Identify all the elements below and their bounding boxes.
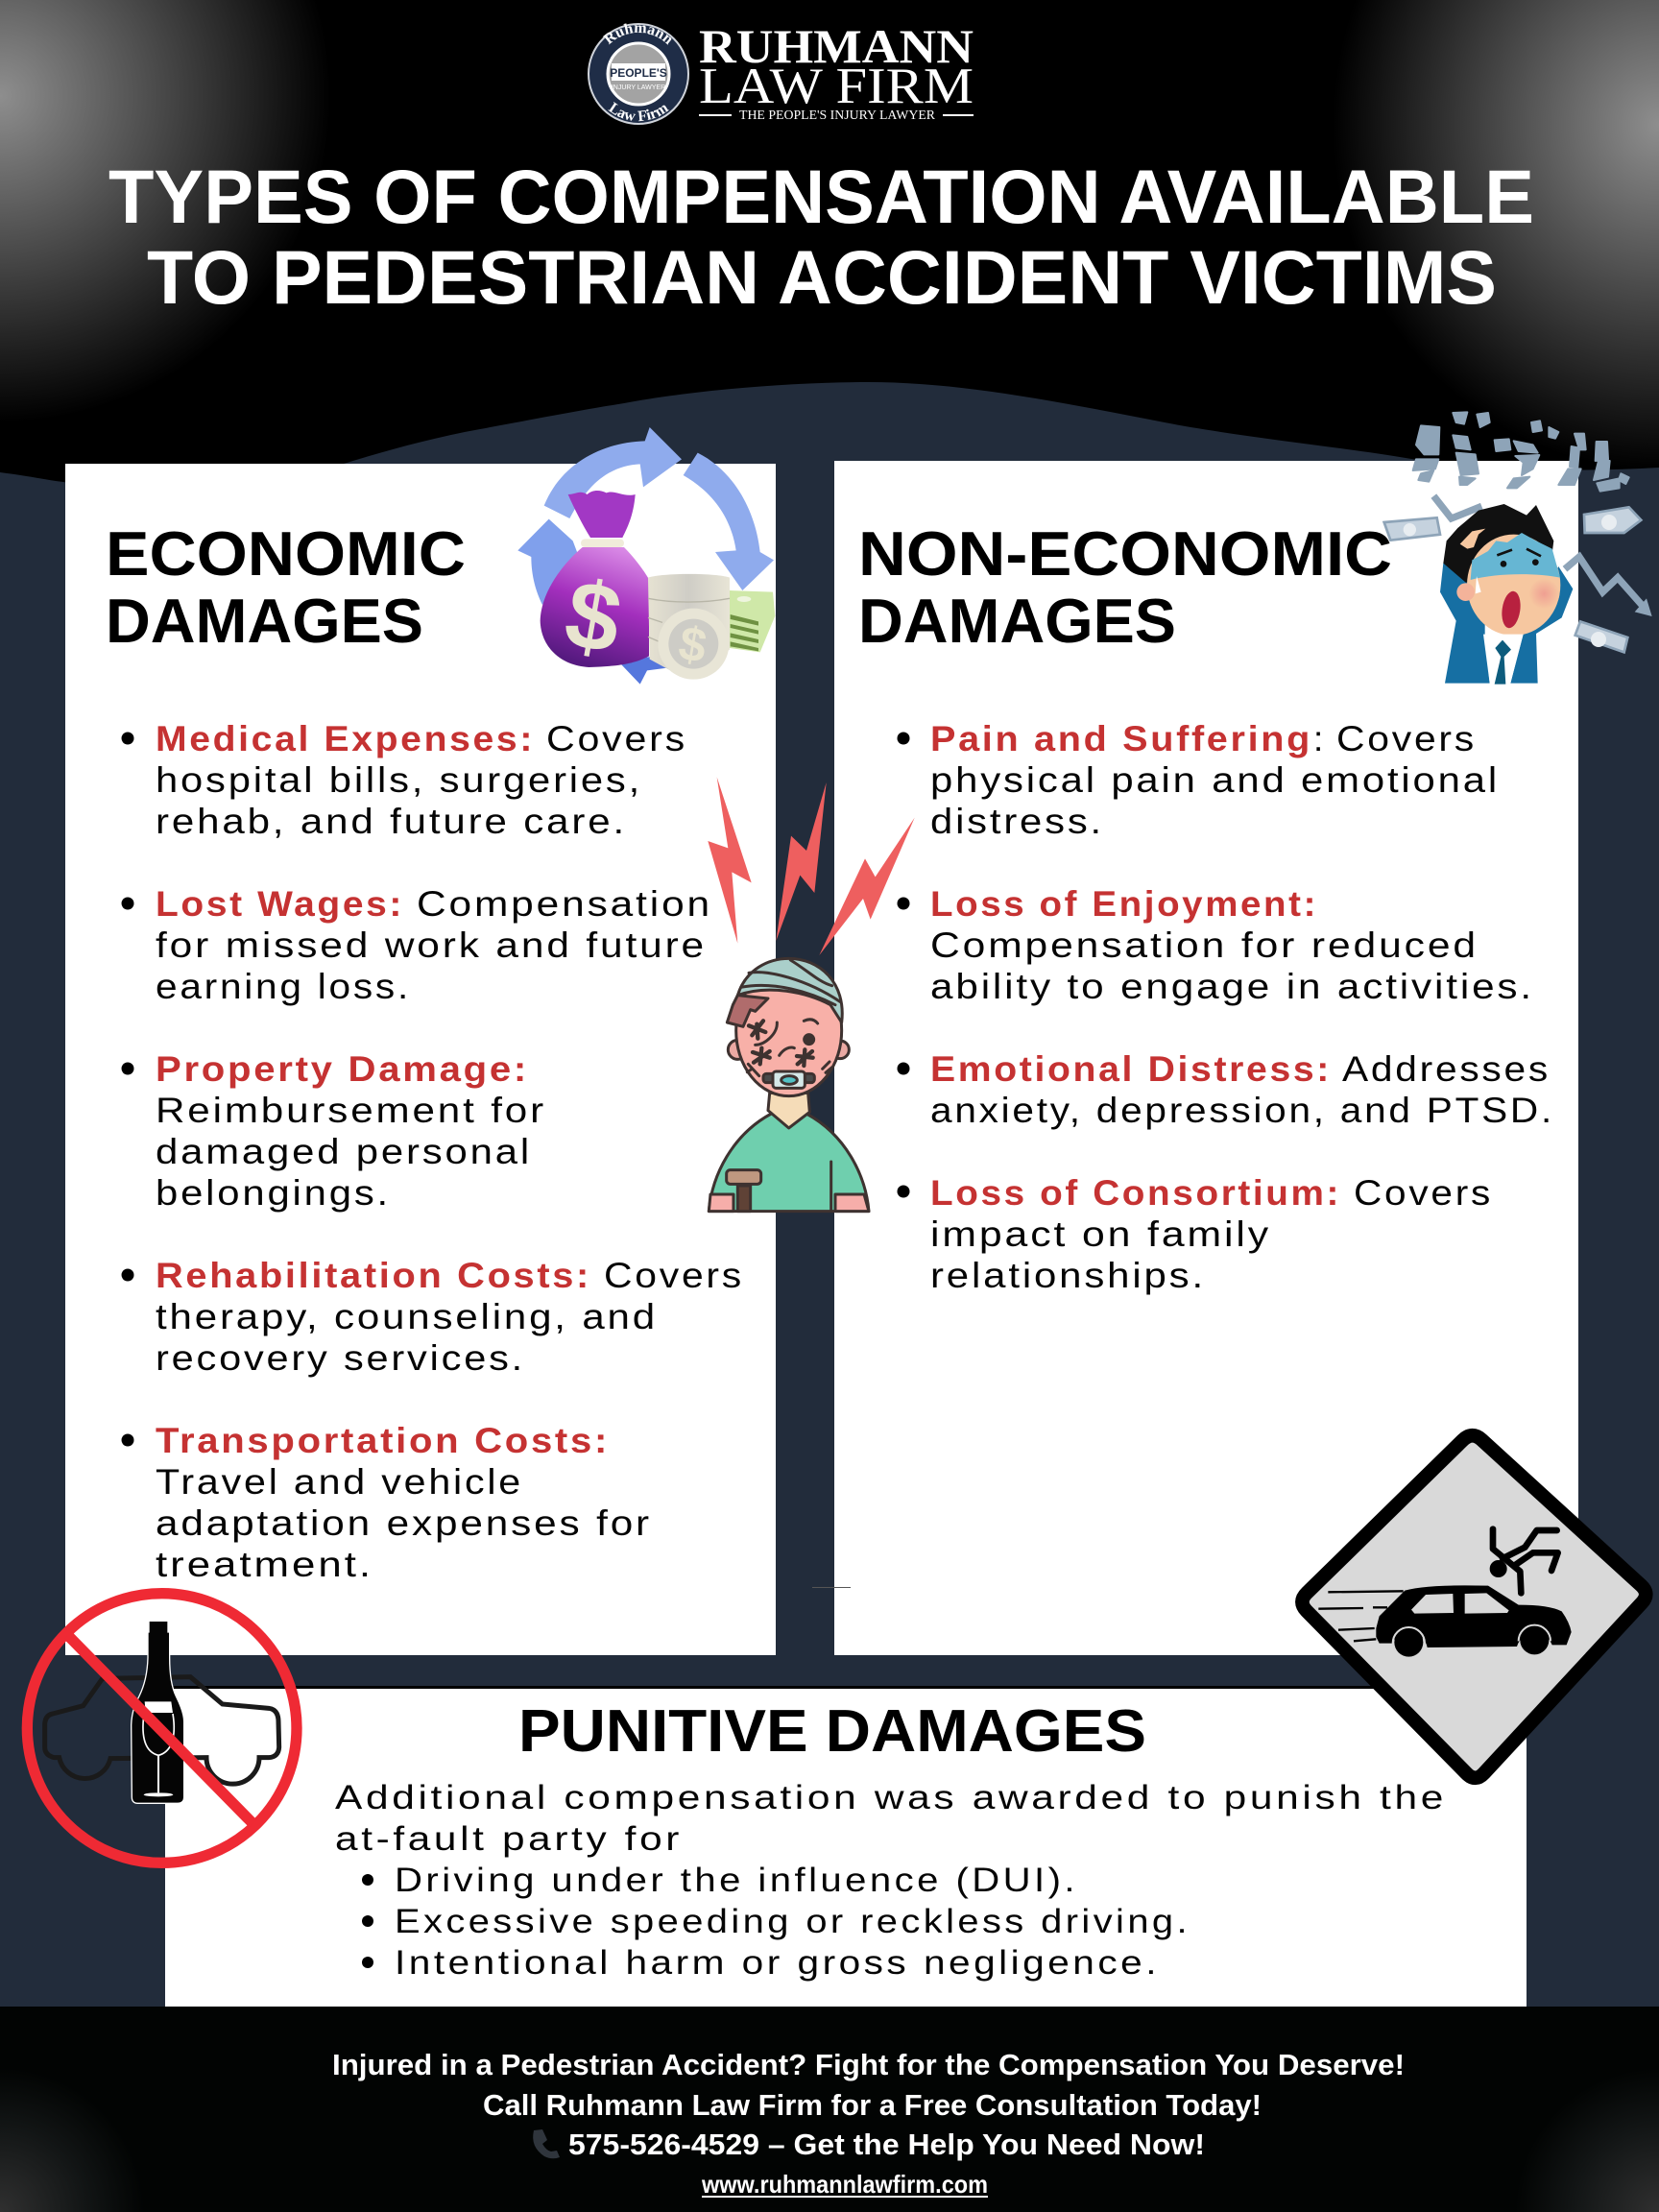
speed lines (1318, 1591, 1404, 1641)
heading: non-economic damages: DAMAGES (858, 586, 1176, 656)
item: property damage: belongings. (156, 1173, 391, 1213)
heading: punitive damages: PUNITIVE DAMAGES (518, 1698, 1146, 1765)
logo wordmark: THE PEOPLE'S INJURY LAWYER (739, 108, 936, 123)
item: lost wages: Compensation (417, 884, 712, 924)
item: pain and suffering: Covers (1336, 719, 1477, 758)
footer (0, 2007, 1659, 2212)
item: emotional distress (897, 1049, 1554, 1130)
item: property damage: Property Damage: (156, 1049, 529, 1089)
item: lost wages: for missed work and future (156, 926, 707, 965)
logo (588, 19, 974, 125)
item: transportation costs: Transportation Costs: (156, 1421, 610, 1460)
wine bottle (132, 1621, 184, 1803)
logo seal: INJURY LAWYER (612, 84, 665, 91)
prohibition circle (27, 1594, 297, 1863)
item: pain and suffering: Pain and Suffering (930, 719, 1312, 758)
item: property damage: Reimbursement for (156, 1091, 546, 1130)
item: rehabilitation costs: therapy, counseling, and (156, 1297, 658, 1336)
item: rehabilitation costs: recovery services. (156, 1338, 525, 1378)
footer headline: Injured in a Pedestrian Accident? Fight for the Compensation You Deserve! (332, 2048, 1405, 2081)
car outline (45, 1677, 279, 1784)
item: transportation costs: treatment. (156, 1545, 373, 1584)
item: pain and suffering (897, 719, 1500, 841)
icon: money bag with coins and arrows (517, 427, 775, 685)
item: pain and suffering: distress. (930, 802, 1104, 841)
falling pedestrian (1493, 1529, 1558, 1593)
footer phone number: 575-526-4529 – Get the Help You Need Now! (568, 2128, 1205, 2161)
heading: economic damages (106, 518, 466, 656)
item: pain and suffering: : (1313, 719, 1326, 758)
lightning bolts (708, 777, 915, 955)
item: loss of enjoyment: ability to engage in activities. (930, 967, 1534, 1006)
heading: non-economic damages: NON-ECONOMIC (858, 518, 1392, 589)
item: medical expenses (121, 719, 687, 841)
logo seal: Ruhmann (603, 23, 672, 45)
logo wordmark: RUHMANN (699, 19, 974, 73)
item: emotional distress: anxiety, depression, and PTSD. (930, 1091, 1554, 1130)
item: rehabilitation costs (121, 1256, 744, 1378)
icon: injured man with lightning bolts (708, 777, 915, 1212)
item: loss of consortium: relationships. (930, 1256, 1206, 1295)
punitive description: at-fault party for (335, 1820, 683, 1858)
item: lost wages: earning loss. (156, 967, 411, 1006)
punitive bullet list: Excessive speeding or reckless driving. (395, 1903, 1190, 1940)
heading: economic damages: ECONOMIC (106, 518, 466, 589)
item: loss of consortium: Loss of Consortium: (930, 1173, 1341, 1213)
footer website: www.ruhmannlawfirm.com (701, 2170, 988, 2199)
item: loss of enjoyment: Loss of Enjoyment: (930, 884, 1318, 924)
panel: economic damages (65, 464, 776, 1655)
item: emotional distress: Emotional Distress: (930, 1049, 1332, 1089)
icon: no drinking and driving sign (27, 1594, 297, 1863)
item: property damage (121, 1049, 546, 1213)
icon: money bag with coins and arrows: $ (675, 615, 710, 673)
logo wordmark (699, 19, 974, 123)
footer call to action: Call Ruhmann Law Firm for a Free Consultation Today! (483, 2088, 1262, 2122)
heading: economic damages: DAMAGES (106, 586, 423, 656)
punitive bullet list: Driving under the influence (DUI). (395, 1862, 1078, 1899)
icon: pedestrian hit warning sign (1302, 1435, 1646, 1778)
heading: non-economic damages (858, 518, 1392, 656)
icon: worried man with falling money (1384, 412, 1652, 685)
item: rehabilitation costs: Covers (604, 1256, 744, 1295)
item: loss of consortium: impact on family (930, 1214, 1271, 1254)
item: loss of enjoyment: Compensation for reduced (930, 926, 1479, 965)
falling debris (1413, 412, 1629, 492)
title: TO PEDESTRIAN ACCIDENT VICTIMS (147, 234, 1497, 320)
icon: phone (533, 2129, 560, 2158)
item: medical expenses: hospital bills, surgeries, (156, 760, 642, 800)
item: loss of consortium: Covers (1354, 1173, 1493, 1213)
item: loss of enjoyment (897, 884, 1534, 1006)
punitive description: Additional compensation was awarded to punish the (335, 1779, 1447, 1816)
title: TYPES OF COMPENSATION AVAILABLE (108, 154, 1534, 239)
item: transportation costs: adaptation expenses for (156, 1503, 652, 1543)
panel: non-economic damages (834, 461, 1578, 1655)
item: transportation costs (121, 1421, 652, 1584)
logo seal: Law Firm (608, 102, 669, 121)
punitive bullet list: Intentional harm or gross negligence. (395, 1944, 1160, 1982)
logo seal (588, 23, 689, 125)
item: emotional distress: Addresses (1342, 1049, 1551, 1089)
punitive description (335, 1779, 1447, 1858)
punitive bullet list (362, 1862, 1190, 1982)
item: lost wages (121, 884, 712, 1006)
falling bills (1384, 507, 1641, 652)
item: transportation costs: Travel and vehicle (156, 1462, 523, 1502)
icon: money bag with coins and arrows: $ (558, 560, 629, 675)
logo wordmark: LAW FIRM (699, 59, 974, 114)
title (108, 154, 1534, 320)
item: lost wages: Lost Wages: (156, 884, 404, 924)
logo seal: PEOPLE'S (610, 66, 667, 80)
car (1376, 1585, 1572, 1657)
injured man (709, 958, 869, 1212)
item: medical expenses: Covers (546, 719, 687, 758)
item: property damage: damaged personal (156, 1132, 532, 1171)
panel: punitive damages (165, 1686, 1527, 2007)
falling chart arrow (1433, 496, 1642, 605)
item: medical expenses: rehab, and future care. (156, 802, 627, 841)
item: rehabilitation costs: Rehabilitation Costs: (156, 1256, 591, 1295)
item: medical expenses: Medical Expenses: (156, 719, 535, 758)
item: loss of consortium (897, 1173, 1493, 1295)
item: pain and suffering: physical pain and emotional (930, 760, 1500, 800)
